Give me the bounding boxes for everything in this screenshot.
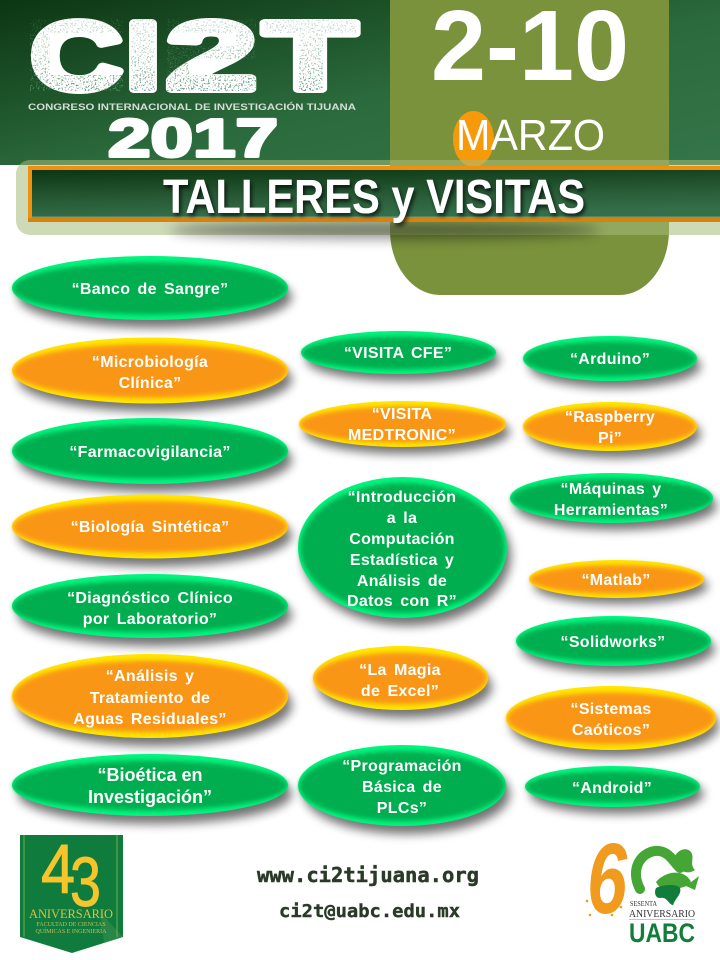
title text: TALLERES y VISITAS xyxy=(163,171,585,224)
workshop: Arduino: “Arduino” xyxy=(570,351,650,368)
logo: 43 Aniversario: ANIVERSARIO xyxy=(29,907,113,921)
logo: UABC 60 Sesenta Aniversario xyxy=(586,823,699,948)
workshop: Biología Sintética: “Biología Sintética” xyxy=(71,519,229,536)
workshop: Farmacovigilancia xyxy=(12,418,292,492)
workshop: Microbiología Clínica: Clínica” xyxy=(119,375,181,392)
visit: VISITA MEDTRONIC xyxy=(299,401,510,454)
website: www.ci2tijuana.org xyxy=(257,863,479,887)
workshop: Introducción a la Computación Estadística y Análisis de Datos con R xyxy=(298,477,511,626)
workshop: Sistemas Caóticos xyxy=(506,686,719,757)
workshop: La Magia de Excel: de Excel” xyxy=(361,683,439,700)
workshop: Programación Básica de PLCs: PLCs” xyxy=(377,800,427,817)
workshop: Introducción a la Computación Estadística y Análisis de Datos con R: Análisis de xyxy=(357,573,447,590)
workshop: Bioética en Investigación: Investigación” xyxy=(88,787,212,807)
workshop: Matlab xyxy=(529,560,708,604)
workshop: Programación Básica de PLCs xyxy=(298,745,510,834)
workshop: Análisis y Tratamiento de Aguas Residuales: Aguas Residuales” xyxy=(73,711,227,728)
workshop: Introducción a la Computación Estadística y Análisis de Datos con R: Computación xyxy=(349,531,455,548)
workshop: Android xyxy=(525,766,704,814)
logo: 43 Aniversario xyxy=(20,830,123,953)
month: Marzo: MARZO xyxy=(456,111,605,160)
workshop: Raspberry Pi xyxy=(523,402,701,458)
workshop: Solidworks xyxy=(516,616,715,673)
workshop: Programación Básica de PLCs: Básica de xyxy=(362,779,442,796)
visit: VISITA CFE: “VISITA CFE” xyxy=(344,345,452,362)
workshop: Análisis y Tratamiento de Aguas Residuales: “Análisis y xyxy=(106,668,194,685)
workshop: Microbiología Clínica: “Microbiología xyxy=(92,354,208,371)
workshop: Máquinas y Herramientas: Herramientas” xyxy=(554,502,668,519)
workshop: Banco de Sangre: “Banco de Sangre” xyxy=(72,281,228,298)
visit: VISITA CFE xyxy=(301,331,500,381)
logo: UABC 60 Sesenta Aniversario: ANIVERSARIO xyxy=(629,909,695,920)
logo: CI2T 2017: CONGRESO INTERNACIONAL DE INVESTIGACIÓN TIJUANA xyxy=(28,101,356,113)
workshop: Solidworks: “Solidworks” xyxy=(561,634,665,651)
workshop: Introducción a la Computación Estadística y Análisis de Datos con R: “Introducción xyxy=(348,489,456,506)
title band xyxy=(16,160,720,239)
visit: VISITA MEDTRONIC: MEDTRONIC” xyxy=(348,427,456,444)
workshop: Máquinas y Herramientas: “Máquinas y xyxy=(561,481,661,498)
workshop: Bioética en Investigación: “Bioética en xyxy=(97,765,203,785)
logo: CI2T 2017 xyxy=(28,18,361,158)
logo: CI2T 2017: 2017 xyxy=(108,108,278,168)
workshop: Diagnóstico Clínico por Laboratorio: por Laboratorio” xyxy=(83,611,217,628)
workshop: Introducción a la Computación Estadística y Análisis de Datos con R: a la xyxy=(387,510,417,527)
workshop: La Magia de Excel xyxy=(313,646,492,718)
header background xyxy=(0,0,720,165)
workshop: Bioética en Investigación xyxy=(12,754,292,824)
workshop: Introducción a la Computación Estadística y Análisis de Datos con R: Datos con R” xyxy=(347,593,457,610)
workshop: Matlab: “Matlab” xyxy=(581,572,651,589)
logo: 43 Aniversario: QUÍMICAS E INGENIERÍA xyxy=(36,927,107,935)
logo: CI2T 2017: C xyxy=(31,3,122,110)
workshop: Análisis y Tratamiento de Aguas Residuales: Tratamiento de xyxy=(90,690,210,707)
workshop: Farmacovigilancia: “Farmacovigilancia” xyxy=(69,444,231,461)
logo: UABC 60 Sesenta Aniversario: 6 xyxy=(587,823,628,935)
workshop: Sistemas Caóticos: “Sistemas xyxy=(571,701,651,718)
workshop: Arduino xyxy=(523,336,701,388)
workshop: Programación Básica de PLCs: “Programación xyxy=(342,758,462,775)
logo: 43 Aniversario: FACULTAD DE CIENCIAS xyxy=(36,922,106,928)
workshop: Android: “Android” xyxy=(572,780,652,797)
workshop: Microbiología Clínica xyxy=(12,338,292,412)
logo: CI2T 2017: T xyxy=(264,3,356,110)
workshop: La Magia de Excel: “La Magia xyxy=(359,662,441,679)
workshop: Biología Sintética xyxy=(12,494,292,566)
logo: UABC 60 Sesenta Aniversario: UABC xyxy=(629,918,695,948)
logo: 43 Aniversario: 4 xyxy=(41,830,75,908)
workshop: Análisis y Tratamiento de Aguas Residuales xyxy=(12,654,292,746)
visit: VISITA MEDTRONIC: “VISITA xyxy=(372,406,432,423)
date panel xyxy=(390,0,669,295)
workshop: Banco de Sangre xyxy=(12,256,292,328)
title bar xyxy=(28,166,720,224)
logo: 43 Aniversario: 3 xyxy=(70,843,101,921)
workshop: Raspberry Pi: Pi” xyxy=(598,430,622,447)
workshop: Raspberry Pi: “Raspberry xyxy=(565,409,655,426)
workshop: Sistemas Caóticos: Caóticos” xyxy=(572,722,650,739)
logo: CI2T 2017: I xyxy=(126,3,160,110)
email: ci2t@uabc.edu.mx xyxy=(279,901,460,922)
workshop: Máquinas y Herramientas xyxy=(510,473,717,530)
logo: CI2T 2017: 2 xyxy=(167,3,256,110)
logo: UABC 60 Sesenta Aniversario: SESENTA xyxy=(630,899,657,908)
workshop: Diagnóstico Clínico por Laboratorio: “Diagnóstico Clínico xyxy=(67,590,233,607)
workshop: Introducción a la Computación Estadística y Análisis de Datos con R: Estadística y xyxy=(350,552,454,569)
workshop: Diagnóstico Clínico por Laboratorio xyxy=(12,574,292,646)
